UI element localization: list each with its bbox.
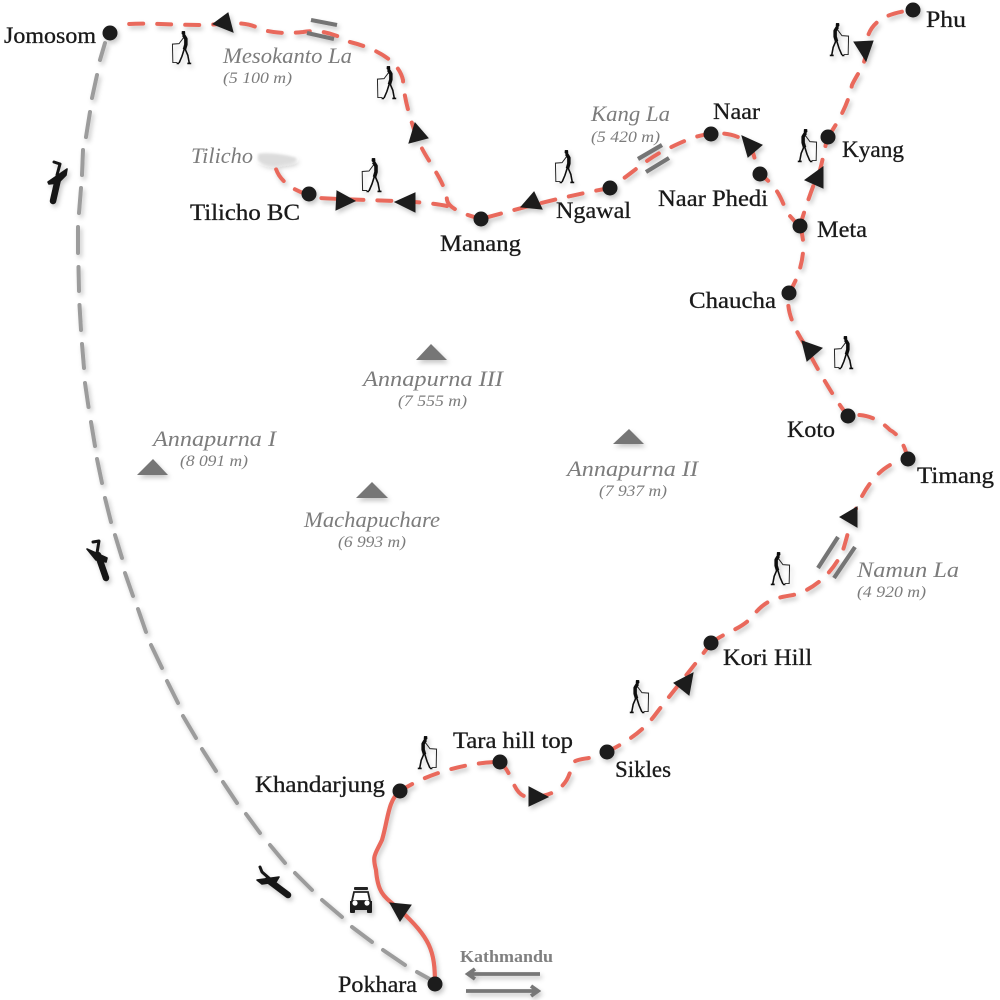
pass and lake labels: Mesokanto La: [222, 43, 352, 68]
place names: Jomosom: [4, 23, 96, 48]
pass and lake labels: [191, 43, 959, 601]
Tilicho lake: [258, 153, 296, 165]
peak labels: [151, 366, 700, 551]
pass and lake labels: Kang La: [590, 101, 670, 126]
peak labels: Annapurna I: [151, 426, 278, 451]
place names: Sikles: [615, 757, 671, 782]
peak labels: Annapurna II: [565, 456, 700, 481]
place names: Naar Phedi: [658, 186, 768, 211]
place names: Kori Hill: [723, 645, 812, 670]
Kathmandu label: Kathmandu: [460, 947, 553, 966]
peak labels: (8 091 m): [180, 453, 248, 470]
peak labels: (7 555 m): [398, 393, 467, 410]
peak labels: (6 993 m): [338, 534, 406, 551]
peak labels: (7 937 m): [599, 483, 667, 500]
pass and lake labels: (4 920 m): [857, 584, 926, 601]
place names: Khandarjung: [255, 772, 386, 797]
pass and lake labels: (5 100 m): [223, 70, 292, 87]
road route: Pokhara to Khandarjung: [374, 791, 435, 984]
icon: jeep: [350, 887, 372, 913]
place names: Tilicho BC: [190, 200, 300, 225]
peak labels: Machapuchare: [303, 507, 440, 532]
place names: Koto: [787, 417, 835, 442]
place names: Timang: [917, 463, 995, 488]
pass markers: [307, 20, 855, 578]
peak labels: Annapurna III: [361, 366, 505, 391]
place names: Tara hill top: [453, 728, 573, 753]
pass and lake labels: Namun La: [856, 557, 959, 582]
place names: Phu: [926, 7, 967, 32]
icons: planes: [48, 162, 288, 895]
place names: Manang: [440, 231, 522, 256]
mountain peaks: [137, 344, 644, 498]
place names: Chaucha: [689, 288, 776, 313]
pass and lake labels: Tilicho: [191, 143, 253, 168]
trekking route: [118, 10, 913, 797]
place names: Kyang: [842, 137, 904, 162]
place names: Naar: [713, 99, 760, 124]
direction arrows: [213, 13, 873, 921]
place names: Pokhara: [338, 972, 417, 997]
pass and lake labels: (5 420 m): [591, 129, 660, 146]
arrows: to and from Kathmandu: [466, 969, 540, 996]
place names: Meta: [817, 217, 867, 242]
flight route: Pokhara to Jomosom: [78, 43, 435, 982]
place names: Ngawal: [556, 198, 631, 223]
icons: trekkers: [172, 23, 853, 768]
